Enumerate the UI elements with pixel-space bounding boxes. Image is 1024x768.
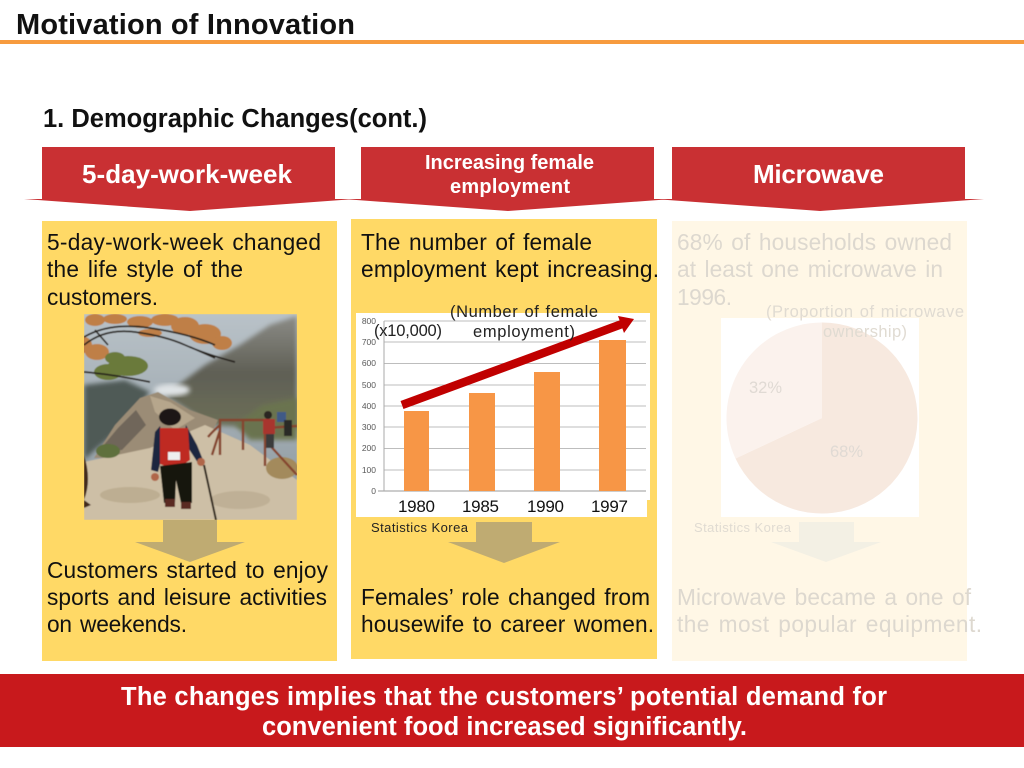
axis labels: 0 xyxy=(371,486,376,496)
chart title: ownership) xyxy=(823,323,907,341)
axis labels: 200 xyxy=(362,443,376,453)
conclusion text: on weekends. xyxy=(47,611,187,637)
intro text xyxy=(47,229,321,310)
foliage xyxy=(76,314,232,360)
axis labels: 400 xyxy=(362,401,376,411)
arrow: down xyxy=(771,522,881,562)
chart title: employment) xyxy=(473,323,575,341)
pie chart: microwave ownership: 32% xyxy=(749,379,782,397)
axis labels: 100 xyxy=(362,465,376,475)
source: Statistics Korea xyxy=(371,520,469,535)
conclusion text xyxy=(677,584,982,637)
photo: hiker on a mountain ridge xyxy=(76,314,298,520)
chart title: (Number of female xyxy=(450,303,598,321)
conclusion banner xyxy=(0,674,1024,747)
axis labels: 500 xyxy=(362,380,376,390)
intro text: at least one microwave in xyxy=(677,256,943,282)
year labels: 1990 xyxy=(527,497,564,516)
conclusion text: sports and leisure activities xyxy=(47,584,327,610)
axis labels xyxy=(362,316,376,496)
title underline xyxy=(0,40,1024,44)
panel: 5-day-work-week xyxy=(42,221,337,661)
unit label: (x10,000) xyxy=(374,322,442,340)
pie chart background xyxy=(721,318,919,517)
intro text: 5-day-work-week changed xyxy=(47,229,321,255)
year labels: 1997 xyxy=(591,497,628,516)
chart title xyxy=(450,303,598,341)
conclusion text: Females’ role changed from xyxy=(361,584,650,610)
intro text: employment kept increasing. xyxy=(361,256,659,282)
source: Statistics Korea xyxy=(694,520,792,535)
trend arrow xyxy=(402,316,634,405)
panel: Microwave xyxy=(672,221,982,661)
hiker xyxy=(150,426,161,472)
conclusion text: Customers started to enjoy xyxy=(47,557,329,583)
railing xyxy=(208,420,297,475)
axis labels: 600 xyxy=(362,358,376,368)
arrow: down xyxy=(448,522,560,563)
year labels: 1985 xyxy=(462,497,499,516)
header arrow: 5-day-work-week xyxy=(24,147,355,211)
conclusion text: housewife to career women. xyxy=(361,611,654,637)
arrow: down xyxy=(135,520,245,562)
conclusion text xyxy=(361,584,654,637)
panel: Increasing female employment xyxy=(351,219,659,659)
axis labels: 700 xyxy=(362,337,376,347)
chart title xyxy=(766,303,964,341)
header arrow: Increasing female employment xyxy=(343,147,672,211)
bar chart: number of female employment xyxy=(356,303,650,517)
axis labels: 300 xyxy=(362,422,376,432)
intro text xyxy=(677,229,952,310)
header arrow: Increasing female employment: Increasing female xyxy=(425,152,594,174)
conclusion text xyxy=(47,557,329,637)
year labels xyxy=(398,497,628,516)
header arrow: 5-day-work-week: 5-day-work-week xyxy=(82,159,293,189)
conclusion text: the most popular equipment. xyxy=(677,611,982,637)
section heading: 1. Demographic Changes(cont.) xyxy=(43,105,427,133)
conclusion text: Microwave became a one of xyxy=(677,584,972,610)
title: Motivation of Innovation xyxy=(16,9,355,41)
intro text: The number of female xyxy=(361,229,592,255)
header arrow: Microwave: Microwave xyxy=(753,159,884,189)
pie chart: microwave ownership xyxy=(726,322,917,514)
chart title: (Proportion of microwave xyxy=(766,303,964,321)
header arrow: Increasing female employment: employment xyxy=(450,176,570,198)
conclusion banner: The changes implies that the customers’ potential demand for xyxy=(121,683,887,711)
bars xyxy=(404,340,626,491)
year labels: 1980 xyxy=(398,497,435,516)
header arrow: Microwave xyxy=(654,147,984,211)
intro text: customers. xyxy=(47,284,158,310)
pie chart: microwave ownership: 68% xyxy=(830,443,863,461)
intro text xyxy=(361,229,659,282)
intro text: 68% of households owned xyxy=(677,229,952,255)
axis labels: 800 xyxy=(362,316,376,326)
distant hikers xyxy=(263,419,275,434)
branches xyxy=(84,326,235,382)
intro text: the life style of the xyxy=(47,256,243,282)
intro text: 1996. xyxy=(677,284,732,310)
conclusion banner: convenient food increased significantly. xyxy=(262,713,747,741)
